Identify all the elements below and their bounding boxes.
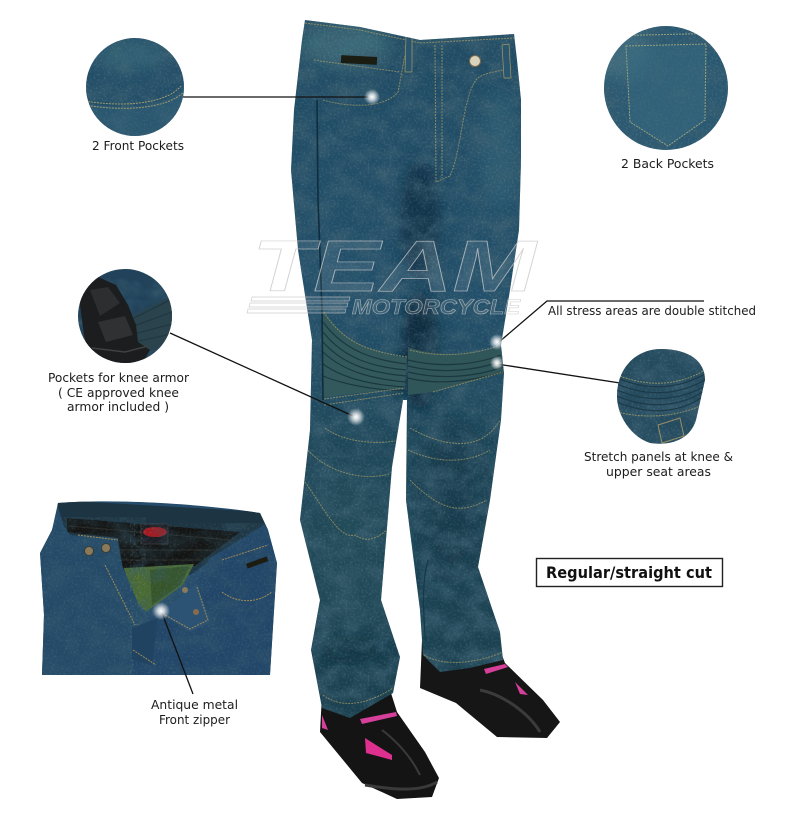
metal button [470, 56, 480, 66]
callout line: stretch panels [497, 364, 620, 383]
jeans buttons [84, 546, 94, 556]
label: knee armor [48, 370, 190, 414]
panel: front pocket detail [85, 37, 186, 140]
callout line: knee armor [170, 333, 353, 416]
label: knee armor: armor included ) [67, 399, 169, 414]
panel: back pocket detail [604, 26, 728, 150]
right boot [420, 640, 560, 738]
callout line: double stitched [499, 301, 704, 342]
label: double stitched: All stress areas are double stitched [548, 303, 756, 318]
watermark: Team Motorcycle: TEAM [252, 227, 539, 307]
black elastic [67, 518, 240, 569]
left knee stretch panel [323, 310, 407, 397]
panel: front zipper photo [38, 498, 280, 678]
panel: knee armor detail [78, 269, 172, 368]
panel: stretch panel detail [615, 347, 707, 447]
right flap and fly [130, 523, 277, 677]
callout line: front pockets [183, 96, 368, 98]
side seam [317, 100, 323, 400]
label: stretch panels: upper seat areas [606, 464, 711, 479]
callout box: regular straight cut: Regular/straight cut [546, 563, 712, 582]
label: knee armor: ( CE approved knee [58, 385, 179, 400]
callout box: regular straight cut [536, 558, 722, 586]
watermark: Team Motorcycle: MOTORCYCLE [352, 296, 521, 319]
label: zipper: Antique metal [151, 697, 238, 712]
label: zipper: Front zipper [159, 712, 231, 727]
size tag [141, 524, 168, 544]
label: stretch panels: Stretch panels at knee & [584, 449, 733, 464]
waistband interior [56, 500, 272, 575]
left boot [320, 693, 439, 799]
watermark: Team Motorcycle [247, 227, 539, 319]
label: stretch panels [584, 449, 733, 479]
green lining [124, 564, 194, 612]
callout glows [152, 89, 505, 620]
label: knee armor: Pockets for knee armor [48, 370, 190, 385]
belt loops [405, 35, 511, 78]
left flap [40, 526, 138, 674]
label: back pockets: 2 Back Pockets [621, 156, 714, 171]
right knee stretch panel [408, 347, 504, 395]
pocket label [341, 55, 377, 65]
callout line: zipper [162, 613, 193, 694]
label: zipper [151, 697, 238, 727]
stitching [305, 23, 514, 703]
label: front pockets: 2 Front Pockets [92, 138, 184, 153]
jeans [291, 20, 521, 718]
